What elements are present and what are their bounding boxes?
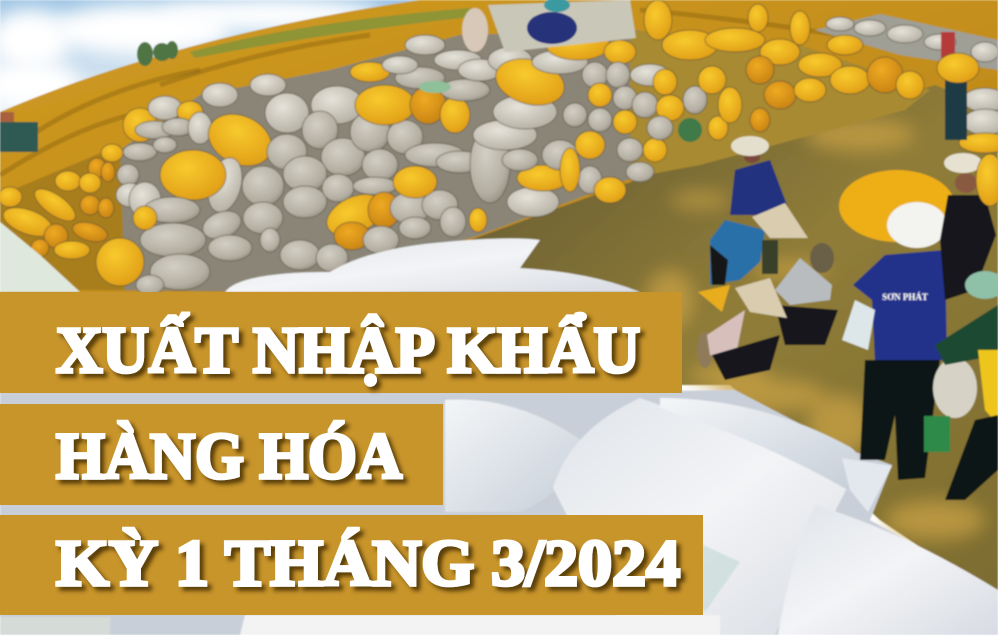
distant sack pile, top right (815, 14, 998, 70)
tree line (137, 41, 178, 66)
front white sacks behind title (0, 238, 998, 635)
left yellow sack pile (0, 144, 125, 290)
trampled stubble ground (400, 85, 998, 600)
worker: blue shirt with white hat (730, 136, 787, 215)
worker: yellow sack carried on shoulders (839, 170, 955, 242)
worker: woman in black with white hat (940, 153, 996, 300)
worker: standing man, navy shirt "Sơn Phát", white hat (853, 202, 947, 480)
title text: HÀNG HÓA: HÀNG HÓA (56, 420, 402, 493)
harvester machine (0, 112, 38, 152)
worker: bent over with conical hat (710, 203, 808, 285)
title bar: line 2 (0, 404, 443, 505)
title text: KỲ 1 THÁNG 3/2024: KỲ 1 THÁNG 3/2024 (56, 527, 680, 600)
straw highlights (646, 119, 985, 540)
title text: XUẤT NHẬP KHẨU: XUẤT NHẬP KHẨU (56, 313, 640, 387)
green strip of field (190, 8, 480, 58)
worker: standing man, navy shirt "Sơn Phát", white hat: SƠN PHÁT (882, 292, 928, 302)
field texture bands (0, 10, 950, 175)
white tarp, lower left (0, 222, 80, 292)
worker: seated woman with conical hat (697, 278, 787, 380)
worker on top of the pile with white tarp (488, 0, 636, 52)
sky with clouds (0, 0, 520, 120)
worker: crouching man with cap (775, 243, 838, 345)
title bar: line 3 (0, 515, 703, 615)
title bar: line 1 (0, 292, 682, 393)
yellow sack pile base, right (630, 30, 930, 178)
grey and yellow sacks of main pile (96, 0, 924, 295)
golden rice field (0, 0, 998, 300)
stacked yellow and white sacks, top right (937, 32, 998, 206)
worker: green shirt and yellow sack, right edge (842, 271, 998, 500)
main sack pile base (105, 30, 640, 292)
